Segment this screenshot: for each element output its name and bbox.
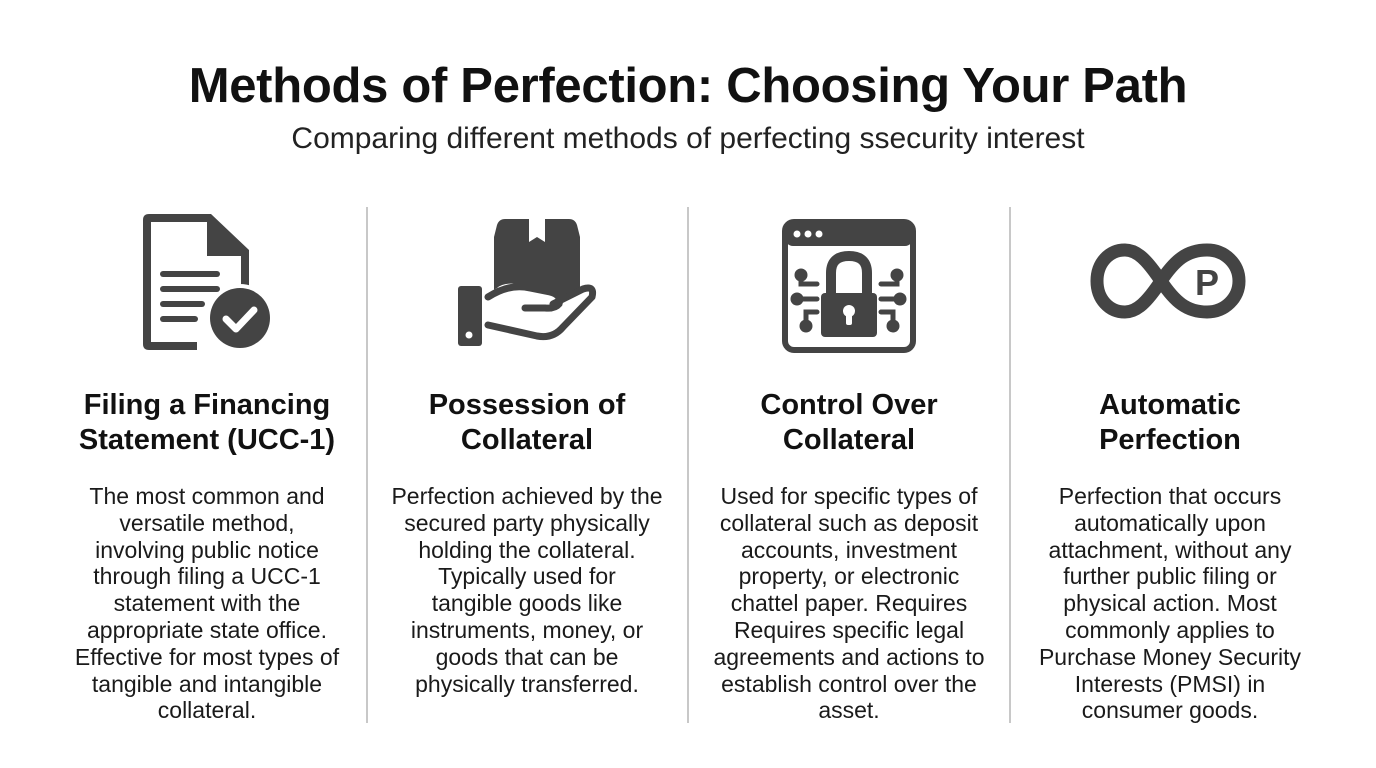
icon: infinity with P [1090,244,1246,318]
body text: involving public notice [95,537,319,563]
subtitle: Comparing different methods of perfecting ssecurity interest [291,122,1085,155]
heading [760,389,938,456]
heading: Possession of [429,389,625,421]
body text: chattel paper. Requires [731,590,967,616]
body text: statement with the [114,590,300,616]
heading: Filing a Financing [84,389,330,421]
heading: Perfection [1099,424,1241,456]
body text: Interests (PMSI) in [1075,671,1265,697]
body text: The most common and [89,483,325,509]
body text: asset. [818,697,880,723]
body text: Effective for most types of [75,644,339,670]
title: Methods of Perfection: Choosing Your Path [189,59,1187,113]
body text: Perfection achieved by the [391,483,663,509]
body text: versatile method, [119,510,295,536]
body text: collateral such as deposit [720,510,978,536]
icon: document with check [143,214,270,350]
body text: holding the collateral. [418,537,636,563]
body text: attachment, without any [1049,537,1291,563]
body text: automatically upon [1074,510,1266,536]
body text: tangible goods like [432,590,622,616]
heading [79,389,335,456]
body text [713,483,985,723]
body text: tangible and intangible [92,671,322,697]
panel: automatic [1039,244,1301,723]
body text: appropriate state office. [87,617,327,643]
body text: Used for specific types of [721,483,977,509]
panel: filing [75,214,340,723]
body text: secured party physically [404,510,650,536]
body text: Perfection that occurs [1059,483,1281,509]
heading: Automatic [1099,389,1241,421]
body text: goods that can be [436,644,618,670]
body text: agreements and actions to [713,644,985,670]
body text: Typically used for [438,563,616,589]
body text: physically transferred. [415,671,639,697]
body text: accounts, investment [741,537,957,563]
body text: collateral. [158,697,256,723]
heading: Statement (UCC-1) [79,424,335,456]
body text: commonly applies to [1065,617,1275,643]
body text: through filing a UCC-1 [93,563,321,589]
body text: property, or electronic [739,563,959,589]
icon: hand holding box [458,219,596,346]
heading [1099,389,1241,456]
panel: control [713,219,985,723]
icon: infinity with P: P [1195,262,1219,303]
body text [1039,483,1301,723]
body text [391,483,663,697]
body text [75,483,340,723]
body text: Purchase Money Security [1039,644,1301,670]
heading: Collateral [783,424,915,456]
body text: physical action. Most [1063,590,1277,616]
body text: further public filing or [1063,563,1277,589]
body text: establish control over the [721,671,977,697]
heading: Collateral [461,424,593,456]
body text: consumer goods. [1082,697,1258,723]
heading [429,389,626,456]
icon: browser window with lock [782,219,916,353]
body text: Requires specific legal [734,617,964,643]
heading: Control Over [760,389,938,421]
panel: possession [391,219,663,697]
body text: instruments, money, or [411,617,643,643]
